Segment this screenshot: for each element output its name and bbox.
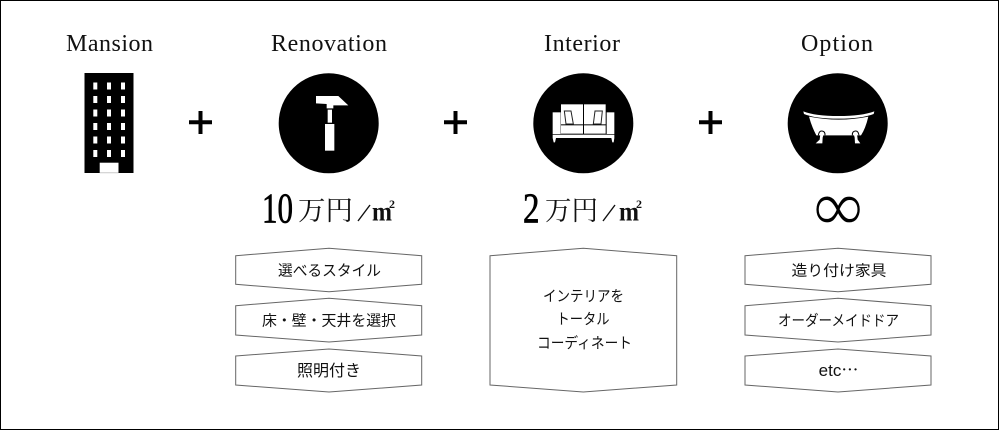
plus sign 3	[699, 111, 722, 134]
price: renovation: m	[372, 196, 392, 226]
plus sign 2	[444, 111, 467, 134]
icon: mansion building	[84, 73, 134, 173]
panel: option item 2: オーダーメイドドア	[778, 312, 899, 330]
panel: option item 3: etc…	[819, 356, 858, 381]
panel: renovation item 3	[236, 349, 422, 392]
plus sign 1	[189, 111, 212, 134]
panel: interior coordinate: インテリアを	[543, 288, 624, 305]
price: renovation: 2	[389, 197, 395, 211]
panel: renovation item 1	[236, 248, 422, 292]
price: renovation: 万円	[298, 189, 353, 228]
panel: interior coordinate	[490, 248, 677, 392]
panel: renovation item 3: 照明付き	[297, 362, 361, 380]
panel: renovation item 1: 選べるスタイル	[278, 262, 381, 280]
price: interior: 2	[636, 197, 642, 211]
price: renovation	[262, 186, 395, 232]
heading: Renovation: Renovation	[271, 31, 387, 57]
panel: option item 1	[745, 248, 931, 292]
price: option infinity: ∞	[808, 164, 868, 248]
panel: renovation item 2	[236, 298, 422, 342]
price: renovation: 10	[262, 186, 293, 232]
panel: interior coordinate: コーディネート	[537, 334, 632, 352]
heading: Option: Option	[801, 31, 873, 57]
heading: Mansion: Mansion	[66, 31, 153, 57]
heading: Interior: Interior	[544, 31, 620, 57]
panel: option item 2	[745, 298, 931, 342]
panel: interior coordinate: トータル	[556, 311, 610, 328]
panel: option item 3	[745, 349, 931, 392]
panel: renovation item 2: 床・壁・天井を選択	[262, 312, 396, 330]
icon: sofa in circle	[533, 73, 633, 173]
price: interior: m	[619, 196, 639, 226]
icon: bathtub in circle	[788, 73, 888, 173]
price: interior: 2	[523, 186, 540, 232]
icon: hammer in circle	[279, 73, 379, 173]
price: interior: 万円	[545, 189, 598, 228]
panel: option item 1: 造り付け家具	[792, 262, 886, 280]
price: interior	[523, 186, 642, 232]
